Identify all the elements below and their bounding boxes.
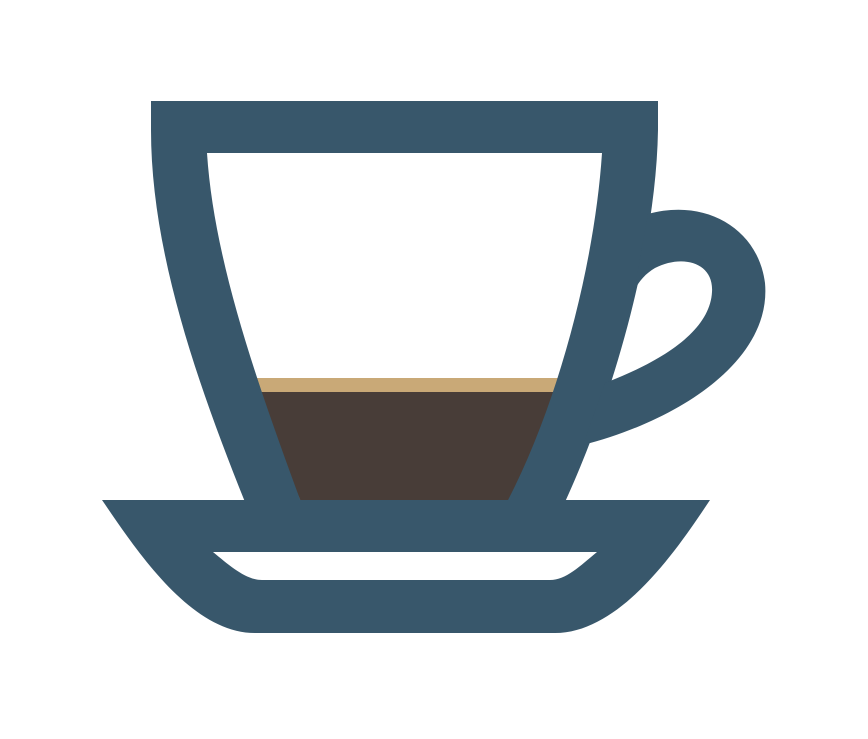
coffee liquid: [250, 378, 570, 502]
saucer: [102, 500, 710, 633]
cup handle: [583, 210, 765, 445]
cup body: [151, 101, 658, 502]
